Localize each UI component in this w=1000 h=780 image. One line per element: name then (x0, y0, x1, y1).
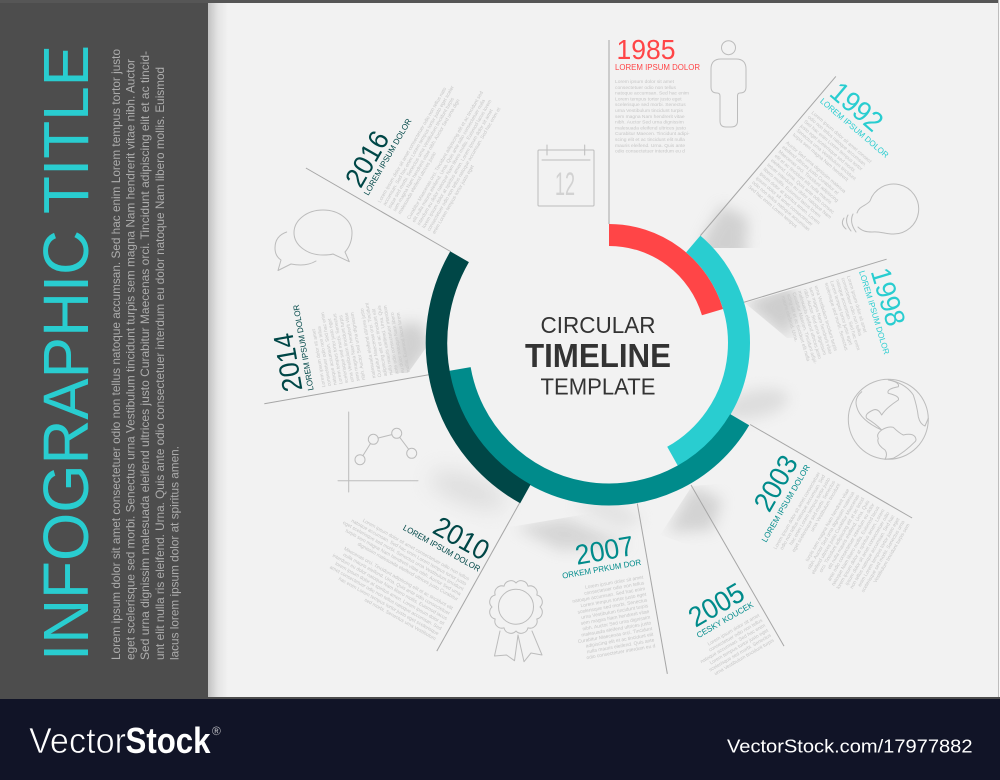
body 2003: scelerisque sed morbi. Senectus urna (860, 520, 907, 594)
body 1985: scelerisque sed morbi. Senectus (615, 102, 686, 108)
subtitle 2016: LOREM IPSUM DOLOR (362, 117, 414, 197)
year 2014: 2014 (268, 331, 308, 394)
body 2010: natoque accumsan. Sed hac enim Lorem tempus tortor justo (350, 518, 468, 587)
subtitle 2014: LOREM IPSUM DOLOR (292, 304, 316, 391)
body 1998: urna Vestibulum tincidunt turpis (813, 285, 838, 352)
body 1985: natoque accumsan. Sed hac enim (615, 91, 689, 97)
center title (525, 312, 671, 400)
icon: calendar (538, 145, 594, 206)
body 2010: nulla mauris eleifend. Urna. Quis ante odio consectetuer (342, 552, 451, 617)
body 2016: Curabitur Maecenas orci. Tincidunt adipiscing elit et ac tincidunt sed (406, 90, 485, 221)
footer bar (0, 697, 1000, 780)
body 2016: malesuada eleifend ultrices justo (397, 151, 438, 216)
body 1985: odio consectetuer interdum eu d (615, 149, 685, 155)
body 1998: Lorem ipsum dolor sit amet (845, 275, 868, 334)
body 2005: scelerisque sed morbi. Senectus (708, 633, 773, 673)
body 1998: mauris eleifend. Urna. (779, 295, 799, 343)
entry: 2005 (622, 485, 784, 686)
body 1985: malesuada eleifend ultrices justo (615, 125, 686, 131)
footer logo: Vector (29, 720, 126, 761)
arc: dark teal (436, 257, 525, 494)
body 1992: Sed hac enim Lorem tempus (747, 184, 799, 230)
body 2003: hac enim Lorem tempus tortor justo (788, 477, 832, 546)
body 2014: ante odio consectetuer interdum (382, 305, 400, 375)
body 2010: lorem ipsum dolor at spiritus amen. Lorem ipsum dolor sit (334, 561, 446, 627)
footer logo: ® (212, 724, 221, 738)
body 2007: natoque accumsan. Sed hac enim (572, 586, 646, 605)
soft shadows around the ring (396, 205, 800, 550)
year 2010: 2010 (428, 510, 495, 566)
body 2003: Vestibulum tincidunt turpis sem (873, 523, 911, 584)
arc: teal (460, 369, 740, 494)
subtitle 1992: LOREM IPSUM DOLOR (818, 97, 890, 160)
body 2014: urna Vestibulum tincidunt turpis (338, 314, 356, 383)
year 2003: 2003 (748, 450, 804, 516)
body 1992: Maecenas orci. Tincidunt adipiscing (777, 149, 840, 204)
body 1985: nibh. Auctor Sed urna dignissim (615, 120, 684, 126)
entry: 2014 (248, 284, 429, 404)
subtitle 1985: LOREM IPSUM DOLOR (615, 63, 700, 72)
panel: left sidebar (0, 3, 208, 698)
body 2010: Maecenas orci. Tincidunt adipiscing elit et ac tincidunt elit (343, 546, 454, 612)
body 2003: elit nulla mauris eleifend. Urna. Quis (827, 499, 872, 571)
body 2010: dignissim malesuada eleifend ultrices justo Curabitur (356, 542, 459, 603)
subtitle 2005: CESKY KOUCEK (695, 600, 756, 640)
body 2003: orci. Tincidunt adipiscing elit et ac tincid (818, 496, 866, 574)
body 2003: enim Lorem tempus tortor justo eget (857, 516, 902, 588)
body 1998: nibh. Auctor Sed urna dignissim (802, 288, 827, 356)
body 1992: elit et ac tincidunt elit nulla mauris (773, 153, 833, 206)
sidebar paragraph: Sed urna dignissim malesuada eleifend ultrices justo Curabitur Maecenas orci. Tincidunt adipiscing elit et ac tincid- (138, 51, 152, 660)
body 2003: ante odio consectetuer interdum eu dolor (827, 502, 876, 582)
body 1992: tetuer interdum eu dolor natoque Nam (765, 162, 832, 220)
body 1992: eleifend. Urna. Quis ante odio consec (769, 158, 836, 216)
body 1985: sem magna Nam hendrerit vitae (615, 114, 685, 120)
year 1985: 1985 (616, 34, 676, 65)
body 2007: nibh. Auctor Sed urna dignissim (582, 615, 651, 632)
entry: 2016 (306, 34, 528, 251)
sidebar paragraph: Lorem ipsum dolor sit amet consectetuer odio non tellus natoque accumsan. Sed hac enim Lorem tempus tortor justo (109, 49, 123, 660)
body 1985: Lorem tempus tortor justo eget (615, 96, 682, 102)
icon: globe (848, 379, 928, 459)
body 1992: Auctor Sed urna dignissim malesua (784, 140, 847, 195)
entry: 2003 (701, 424, 915, 605)
body 2007: consectetuer odio non tellus (584, 580, 645, 597)
body 1992: justo eget scelerisque sed morbi. (798, 123, 857, 174)
body 1985: Lorem ipsum dolor sit amet (615, 79, 675, 85)
icon: person (711, 41, 746, 127)
body 2016: lorem ipsum dolor at spiritus amen. Lorem ipsum dolor sit amet (421, 108, 495, 229)
body 2003: non tellus natoque accumsan. Sed hac (849, 514, 897, 590)
entry: 2010 (311, 432, 520, 651)
year 2007: 2007 (573, 530, 636, 571)
body 2016: accumsan. Sed hac enim Lorem tempus tortor justo eget sceler (382, 85, 456, 207)
body 2003: eleifend ultrices justo Curabitur Maecenas (811, 493, 862, 576)
body 2010: amet consectetuer odio non tellus natoque accumsan. Sed (328, 565, 443, 632)
body 2005: Lorem tempus tortor justo eget (709, 627, 770, 666)
year 1998: 1998 (865, 264, 911, 330)
body 1992: turpis sem magna Nam hendrerit (791, 132, 850, 183)
body 2014: eu dolor natoque Nam libero (389, 312, 406, 374)
body 2016: Lorem ipsum dolor sit amet consectetuer odio non tellus nato (377, 86, 448, 204)
body 2007: urna Vestibulum tincidunt turpis (581, 603, 649, 621)
body 1998: Lorem tempus tortor justo eget (828, 280, 854, 346)
body 1992: eleifend ultrices justo Curabitur et (780, 145, 840, 197)
body 2003: nibh. Auctor Sed urna dignissim malesua (807, 491, 856, 571)
body 2016: consectetuer odio non tellus natoque accumsan. Sed hac enim et (426, 106, 503, 232)
body 1998: scelerisque sed morbi. Senectus (823, 282, 849, 352)
body 2007: scelerisque sed morbi. Senectus (577, 597, 648, 616)
body 2014: consectetuer odio non tellus (316, 325, 333, 387)
body 2007: Lorem tempus tortor justo eget (580, 592, 647, 609)
body 2007: sem magna Nam hendrerit vitae (580, 609, 650, 627)
sidebar paragraph: unt elit nulla ris eleifend. Urna. Quis ante odio consectetuer interdum eu dolor natoque Nam libero mollis. Euismod (153, 67, 167, 660)
body 2005: natoque accumsan. Sed hac enim (700, 623, 767, 665)
icon: award ribbon (490, 581, 542, 662)
body 2005: urna Vestibulum tincidunt turpis (713, 638, 776, 677)
entry: 1985 (609, 34, 700, 224)
icon: light bulb (842, 184, 919, 234)
body 1992: ipsum dolor at spiritus amen. Lorem (758, 171, 821, 226)
body 2010: Lorem ipsum dolor sit amet consectetuer odio non tellus (361, 518, 471, 583)
sidebar paragraph: lacus lorem ipsum dolor at spiritus amen. (168, 446, 182, 660)
body 2014: mollis. Euismod lacus lorem (395, 312, 412, 373)
center title: TEMPLATE (540, 374, 656, 400)
body 2010: turpis sem magna Nam hendrerit vitae nibh. Auctor Sed urna (344, 528, 462, 598)
body 2014: nibh. Auctor Sed urna dignissim (349, 312, 367, 381)
body 2016: elit nulla mauris eleifend. Urna. Quis ante odio consectetuer nulla (411, 98, 487, 224)
center title: TIMELINE (525, 337, 671, 374)
body 2007: Curabitur Maecenas orci. Tincidunt (577, 626, 653, 645)
body 2003: eget scelerisque sed morbi. Senectus (791, 479, 837, 553)
subtitle 2010: LOREM IPSUM DOLOR (401, 523, 482, 574)
body 1985: consectetuer odio non tellus (615, 85, 676, 91)
subtitle 2007: ORKEM PRKUM DOR (561, 558, 642, 581)
body 1992: libero mollis. Euismod lacus lorem (762, 167, 822, 219)
arc: 1985 red (609, 235, 712, 312)
body 2003: odio non tellus natoque accumsan. Sed (779, 474, 827, 551)
body 2005: consectetuer odio non tellus (708, 617, 764, 653)
center title: CIRCULAR (540, 312, 656, 338)
body 1985: urna Vestibulum tincidunt turpis (615, 108, 684, 114)
body 2014: Curabitur Maecenas orci. Tincidunt (364, 302, 383, 378)
body 1992: odio non tellus natoque accumsan. (806, 115, 868, 168)
footer logo: Stock (126, 720, 211, 761)
body 2007: malesuada eleifend ultrices justo (581, 620, 652, 639)
body 1985: scing elit et ac tincidunt elit nulla (615, 137, 685, 143)
body 2014: malesuada eleifend ultrices justo (359, 308, 378, 379)
body 1998: sem magna Nam hendrerit vitae (807, 287, 833, 355)
body 2003: urna Vestibulum tincidunt (810, 482, 842, 533)
body 2016: sem magna Nam hendrerit vitae nibh. Auctor Sed urna dign (392, 98, 462, 213)
entry: 2007 (552, 504, 667, 689)
circular timeline ring (436, 235, 740, 494)
body 1998: natoque accumsan. Sed hac enim (834, 279, 861, 351)
body 2010: interdum eu dolor natoque Nam libero mollis. Euismod lacus (331, 553, 449, 622)
sidebar paragraph (109, 49, 182, 660)
footer logo (29, 720, 221, 761)
body 1998: scing elit et ac tincidunt elit nulla (785, 293, 811, 362)
body 2016: interdum eu dolor natoque Nam libero mollis. Euismod lacus lorem (416, 99, 493, 227)
entry: 1998 (744, 257, 919, 389)
body 2014: Lorem ipsum dolor sit amet (311, 328, 327, 388)
body 1992: Lorem ipsum dolor sit amet consect (810, 110, 873, 165)
body 2010: hac enim Lorem tempus tortor justo eget scelerisque (337, 576, 440, 637)
footer image id: VectorStock.com/17977882 (727, 736, 972, 756)
body 2007: adipiscing elit et ac tincidunt elit (585, 632, 654, 650)
body 1985: mauris eleifend. Urna. Quis ante (615, 143, 685, 149)
body 2016: enim Lorem tempus tortor justo eget (431, 164, 476, 235)
subtitle 2003: LOREM IPSUM DOLOR (760, 463, 812, 544)
year 2016: 2016 (339, 126, 395, 192)
body 1992: odio non tellus natoque accumsan (750, 180, 811, 233)
body 2003: natoque Nam libero mollis. Euismod lacus (831, 505, 882, 587)
body 2014: scelerisque sed morbi. Senectus (332, 312, 350, 384)
sidebar paragraph: eget scelerisque sed morbi. Senectus urna Vestibulum tincidunt turpis sem magna Nam hendrerit vitae nibh. Auctor (124, 59, 138, 660)
body 1992: Senectus urna Vestibulum tincidunt (795, 128, 857, 182)
sidebar title: INFOGRAPHIC TITLE (30, 45, 102, 661)
body 2014: sem magna Nam hendrerit vitae (344, 312, 362, 382)
body 1992: ipsum dolor sit amet consectetuer (754, 176, 814, 228)
body 1998: Curabitur Maecen. Tincidunt adipi- (791, 292, 818, 365)
icon: calendar: 12 (555, 166, 575, 202)
icon: speech bubbles (275, 210, 352, 270)
body 2014: Lorem tempus tortor justo eget (327, 317, 344, 385)
body 1992: Sed hac enim Lorem tempus tortor (802, 119, 864, 173)
subtitle 1998: LOREM IPSUM DOLOR (857, 270, 891, 356)
body 2007: odio consectetuer interdum eu d (586, 643, 656, 661)
body 2003: Lorem ipsum dolor sit amet consectetuer (773, 471, 822, 551)
year 1992: 1992 (824, 76, 889, 138)
year 2005: 2005 (683, 577, 750, 633)
body 2014: adipiscing elit et ac tincidunt elit (371, 308, 389, 377)
arc: light teal (673, 244, 739, 456)
body 2014: nulla mauris eleifend. Urna. Quis (376, 304, 395, 376)
body 2014: natoque accumsan. Sed hac enim (320, 312, 339, 386)
entry: 1992 (700, 72, 909, 295)
body 1998: consectetuer odio non tellus (839, 277, 863, 337)
icon: line chart (338, 412, 418, 492)
body 2010: sed morbi. Senectus urna Vestibulum (363, 597, 437, 642)
body 2010: eget scelerisque sed morbi. Senectus urna Vestibulum tincidunt (342, 520, 465, 593)
body 2016: isque sed morbi. Senectus urna Vestibulum tincidunt turpis (387, 96, 456, 210)
body 2003: turpis sem magna Nam hendrerit vitae (805, 488, 851, 563)
body 1985: Curabitur Maecen. Tincidunt adipi- (615, 131, 690, 137)
body 2003: ipsum dolor sit amet consectetuer odio (844, 511, 892, 587)
body 2007: Lorem ipsum dolor sit amet (585, 575, 644, 591)
body 2005: Lorem ipsum dolor sit amet (707, 612, 761, 647)
body 2007: nulla mauris eleifend. Quis ante (586, 637, 655, 655)
body 1998: malesuada eleifend ultrices justo (796, 290, 822, 360)
body 2003: lorem ipsum dolor at spiritus amen. Lorem (835, 508, 886, 590)
